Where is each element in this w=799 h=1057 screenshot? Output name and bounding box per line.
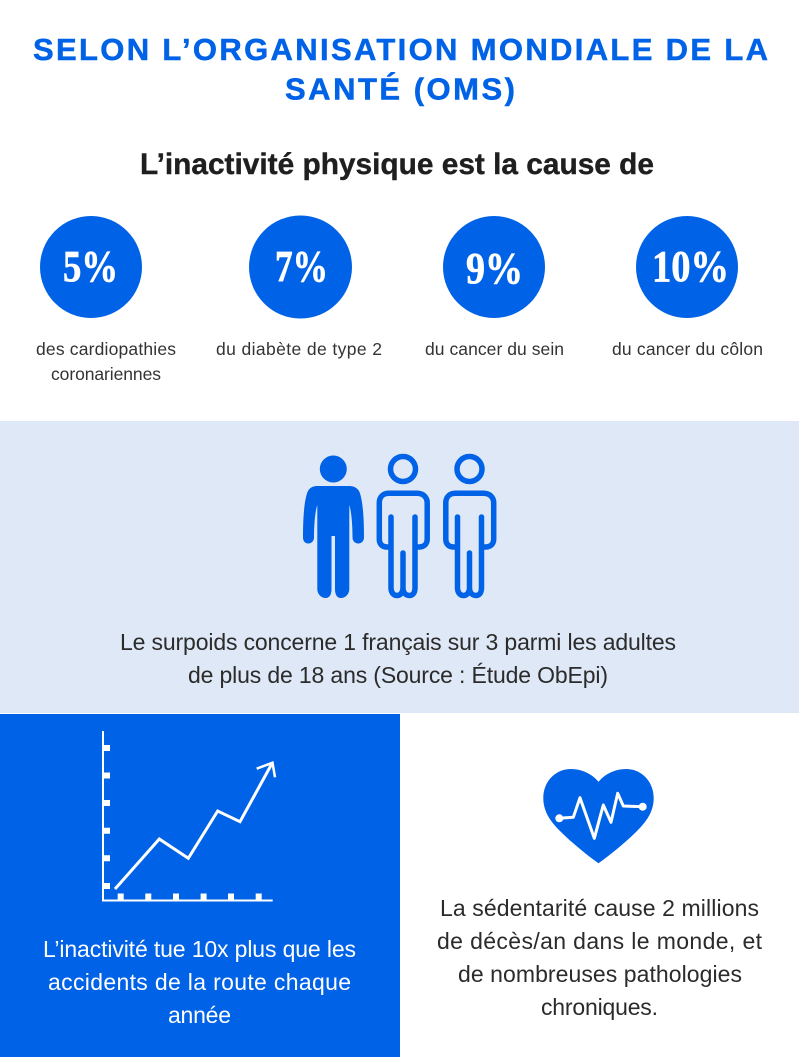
stat: 7% diabète: du diabète de type 2 xyxy=(216,339,382,359)
stat: 9% cancer du sein xyxy=(425,216,564,359)
text: sédentarité: de décès/an dans le monde, et xyxy=(437,928,763,954)
panel: inactivité xyxy=(0,714,400,1057)
stat: 9% cancer du sein: du cancer du sein xyxy=(425,339,564,359)
icon: three people xyxy=(303,456,494,598)
text: surpoids: Le surpoids concerne 1 français sur 3 parmi les adultes xyxy=(120,629,676,655)
stat: 5% cardiopathies: coronariennes xyxy=(51,364,161,384)
stat: 10% cancer du côlon xyxy=(612,216,763,359)
icon: rising line chart xyxy=(103,731,275,900)
icon: heart with pulse xyxy=(543,769,654,863)
panel: sédentarité xyxy=(437,769,763,1020)
stat: 7% diabète xyxy=(216,216,382,359)
title: SELON L’ORGANISATION MONDIALE DE LA xyxy=(33,32,768,67)
stat: 10% cancer du côlon: 10% xyxy=(652,242,729,291)
stat: 10% cancer du côlon: du cancer du côlon xyxy=(612,339,763,359)
text: sédentarité: chroniques. xyxy=(541,994,658,1020)
title xyxy=(33,32,768,106)
stat: 7% diabète: 7% xyxy=(275,242,328,291)
text: sédentarité: de nombreuses pathologies xyxy=(458,961,742,987)
text: sédentarité: La sédentarité cause 2 millions xyxy=(440,895,759,921)
panel: surpoids xyxy=(0,421,799,713)
subtitle: L’inactivité physique est la cause de xyxy=(140,148,654,181)
text: sédentarité xyxy=(437,895,763,1020)
stat: 5% cardiopathies: 5% xyxy=(63,242,118,291)
text: inactivité: accidents de la route chaque xyxy=(48,969,351,995)
text: inactivité: L’inactivité tue 10x plus que les xyxy=(43,936,356,962)
text: surpoids: de plus de 18 ans (Source : Étude ObEpi) xyxy=(188,662,608,688)
stat: 5% cardiopathies xyxy=(36,216,176,384)
text: inactivité xyxy=(43,936,356,1028)
stat: 9% cancer du sein: 9% xyxy=(466,244,523,293)
text: surpoids xyxy=(120,629,676,688)
stat: 5% cardiopathies: des cardiopathies xyxy=(36,339,176,359)
text: inactivité: année xyxy=(168,1002,231,1028)
title: SANTÉ (OMS) xyxy=(285,72,515,106)
